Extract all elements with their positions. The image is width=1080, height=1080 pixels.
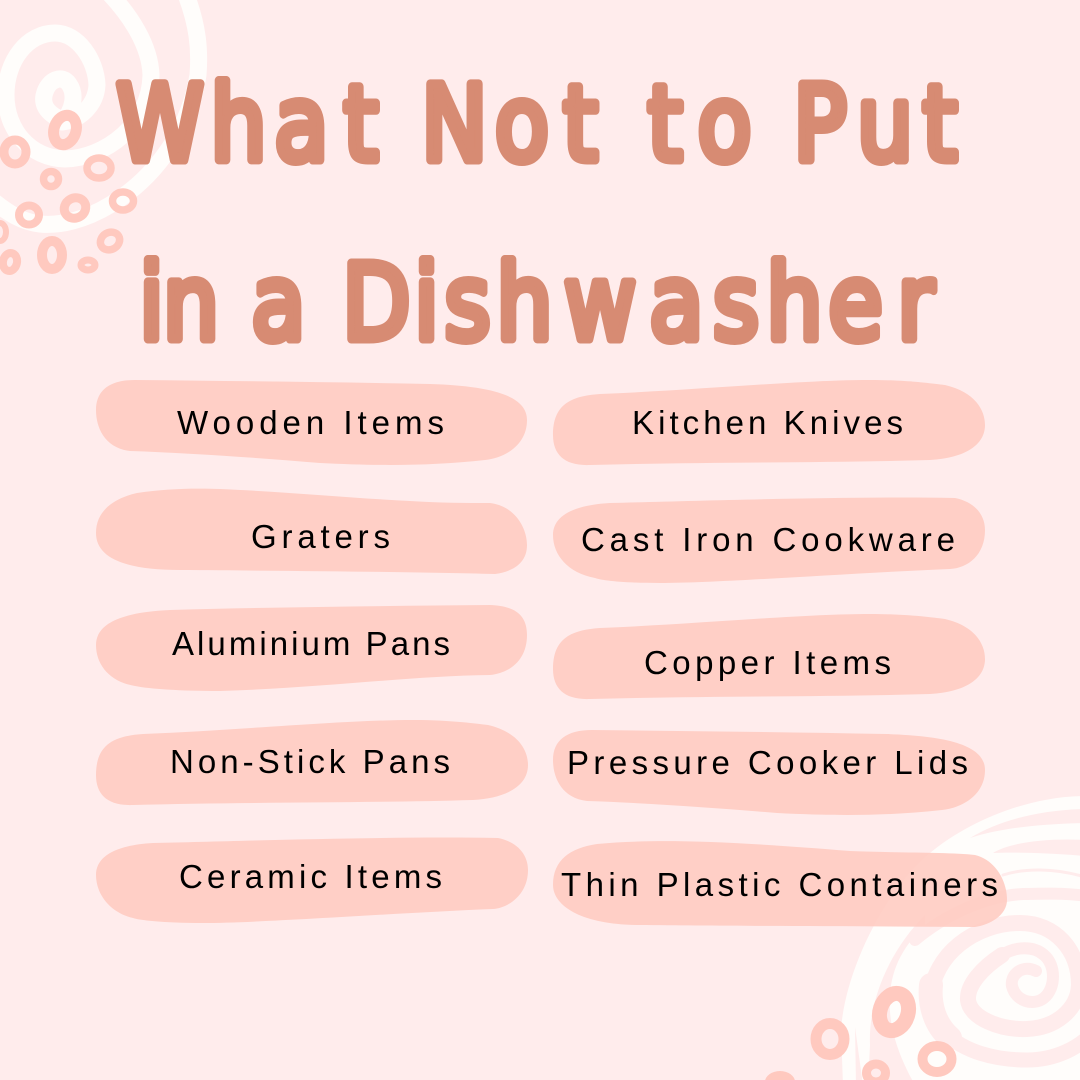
- item: Pressure Cooker Lids: Pressure Cooker Lids: [567, 744, 968, 781]
- decoration: bottom-right pink rings: [765, 990, 952, 1080]
- item: Ceramic Items: Ceramic Items: [179, 858, 442, 895]
- item: Thin Plastic Containers: Thin Plastic Containers: [561, 866, 998, 903]
- item: Aluminium Pans: [96, 605, 527, 691]
- item: Thin Plastic Containers: [553, 841, 1007, 927]
- title: What Not to Put: [116, 63, 957, 185]
- decoration: top-left pink rings: [0, 112, 134, 272]
- decoration: bottom-right spiral: [841, 796, 1080, 1080]
- item: Copper Items: Copper Items: [644, 644, 891, 681]
- item: Graters: Graters: [251, 518, 390, 555]
- item: Aluminium Pans: Aluminium Pans: [172, 625, 450, 662]
- item: Non-Stick Pans: [96, 720, 528, 805]
- item: Cast Iron Cookware: Cast Iron Cookware: [581, 521, 955, 558]
- item: Wooden Items: [96, 380, 527, 465]
- item: Pressure Cooker Lids: [553, 730, 985, 815]
- title: in a Dishwasher: [139, 242, 934, 364]
- item: Non-Stick Pans: Non-Stick Pans: [170, 743, 450, 780]
- item: Kitchen Knives: [553, 380, 985, 465]
- item: Copper Items: [553, 614, 985, 699]
- decoration: top-left spiral: [0, 0, 199, 224]
- item: Kitchen Knives: Kitchen Knives: [632, 404, 903, 441]
- title: [116, 63, 957, 364]
- item: Graters: [96, 489, 527, 574]
- item: Wooden Items: Wooden Items: [177, 404, 444, 441]
- item: Ceramic Items: [96, 838, 528, 923]
- item: Cast Iron Cookware: [553, 498, 985, 583]
